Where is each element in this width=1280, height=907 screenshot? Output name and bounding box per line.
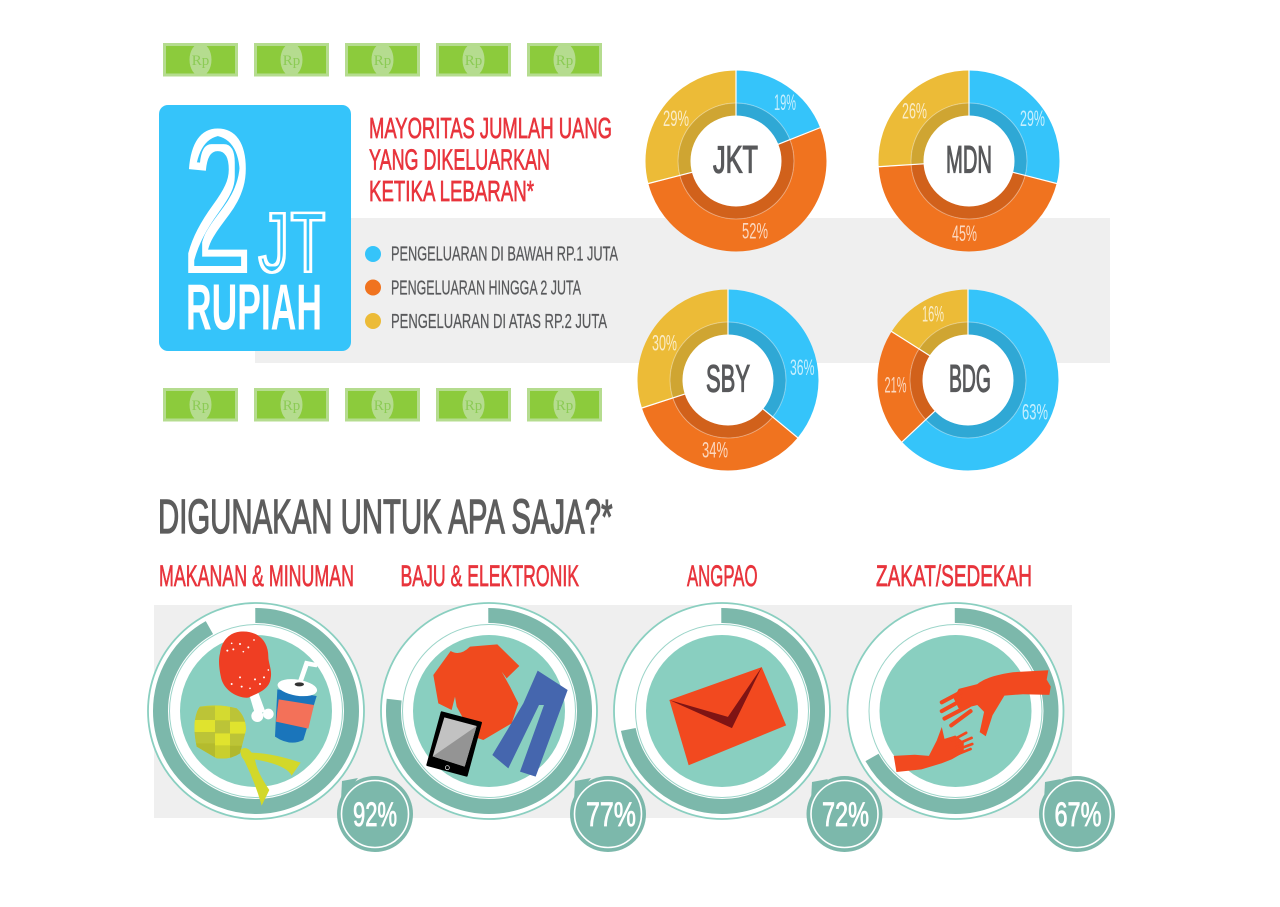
category labels — [159, 560, 1032, 593]
donut chart: JKT: 52% — [742, 218, 768, 244]
icon: clothes and tablet — [427, 644, 568, 777]
top row of banknotes: Rp — [465, 53, 482, 69]
callout: 72% — [806, 776, 882, 852]
panel: angpao gauge — [614, 603, 830, 819]
RUPIAH: RUPIAH — [186, 272, 322, 344]
donut chart: SBY: SBY — [706, 358, 750, 400]
callout: 77%: 77% — [586, 796, 636, 834]
bottom row of banknotes: Rp — [283, 398, 300, 414]
legend: PENGELUARAN DI BAWAH RP.1 JUTA — [391, 244, 618, 266]
heading: mayoritas jumlah uang: MAYORITAS JUMLAH UANG — [369, 113, 612, 145]
icon: food and drink — [190, 631, 318, 806]
donut chart: MDN: 45% — [952, 221, 977, 246]
callout: 72%: 72% — [822, 796, 869, 834]
panel: 2 JT Rupiah — [159, 86, 351, 351]
donut chart: JKT: JKT — [713, 140, 758, 182]
donut chart: SBY: 30% — [652, 330, 677, 356]
donut chart: BDG: BDG — [949, 358, 991, 400]
panel: makanan & minuman gauge — [148, 603, 364, 819]
donut chart: MDN: 26% — [902, 98, 927, 124]
donut chart: JKT — [640, 65, 832, 257]
icon: upper hand — [942, 670, 1051, 736]
callout: 67% — [1039, 776, 1115, 852]
donut chart: BDG: 21% — [884, 372, 906, 398]
donut chart: JKT: 19% — [774, 90, 796, 115]
icon: chicken drumstick — [219, 631, 274, 722]
donut chart: JKT: 29% — [663, 106, 689, 131]
JT: JT — [257, 192, 326, 292]
category labels: MAKANAN & MINUMAN — [159, 560, 354, 593]
donut chart: BDG: 63% — [1022, 400, 1048, 424]
donut chart: SBY: 36% — [790, 355, 814, 380]
icon: lower hand — [894, 727, 972, 772]
top row of banknotes: Rp — [374, 53, 391, 69]
category labels: BAJU & ELEKTRONIK — [400, 560, 579, 593]
panel: baju & elektronik gauge — [381, 603, 597, 819]
heading: mayoritas jumlah uang: YANG DIKELUARKAN — [369, 144, 550, 176]
top row of banknotes — [163, 43, 602, 76]
legend — [365, 244, 618, 333]
callout: 67%: 67% — [1054, 796, 1102, 834]
icon: tablet — [427, 712, 481, 776]
donut chart: MDN: MDN — [946, 140, 992, 182]
icon: shirt — [433, 644, 519, 740]
category labels: ZAKAT/SEDEKAH — [876, 560, 1032, 593]
callout: 92%: 92% — [353, 796, 397, 834]
donut chart: MDN — [878, 70, 1059, 251]
icon: ketupat — [190, 703, 301, 806]
icon: soft drink cup — [275, 661, 318, 743]
top row of banknotes: Rp — [556, 53, 573, 69]
donut chart: BDG: 16% — [922, 302, 944, 326]
legend: PENGELUARAN DI ATAS RP.2 JUTA — [391, 311, 607, 333]
bottom row of banknotes: Rp — [465, 398, 482, 414]
panel: zakat/sedekah gauge — [848, 603, 1064, 819]
bottom row of banknotes: Rp — [556, 398, 573, 414]
donut chart: SBY — [623, 275, 833, 485]
callout: 77% — [570, 776, 646, 852]
donut chart: BDG — [863, 275, 1073, 485]
category labels: ANGPAO — [687, 560, 758, 593]
top row of banknotes: Rp — [192, 53, 209, 69]
icon: trousers — [492, 671, 568, 777]
bottom row of banknotes: Rp — [374, 398, 391, 414]
big numeral 2: 2 — [184, 86, 252, 317]
donut chart: MDN: 29% — [1020, 106, 1045, 131]
donut chart: SBY: 34% — [702, 438, 728, 462]
bottom row of banknotes: Rp — [192, 398, 209, 414]
heading: mayoritas jumlah uang — [369, 113, 612, 208]
icon: envelope — [669, 667, 786, 765]
legend: PENGELUARAN HINGGA 2 JUTA — [391, 278, 581, 300]
bottom row of banknotes — [163, 388, 602, 422]
top row of banknotes: Rp — [283, 53, 300, 69]
heading: mayoritas jumlah uang: KETIKA LEBARAN* — [369, 176, 534, 208]
icon: giving hands — [894, 670, 1051, 772]
heading: digunakan untuk apa saja: DIGUNAKAN UNTUK APA SAJA?* — [158, 491, 612, 544]
callout: 92% — [337, 776, 413, 852]
